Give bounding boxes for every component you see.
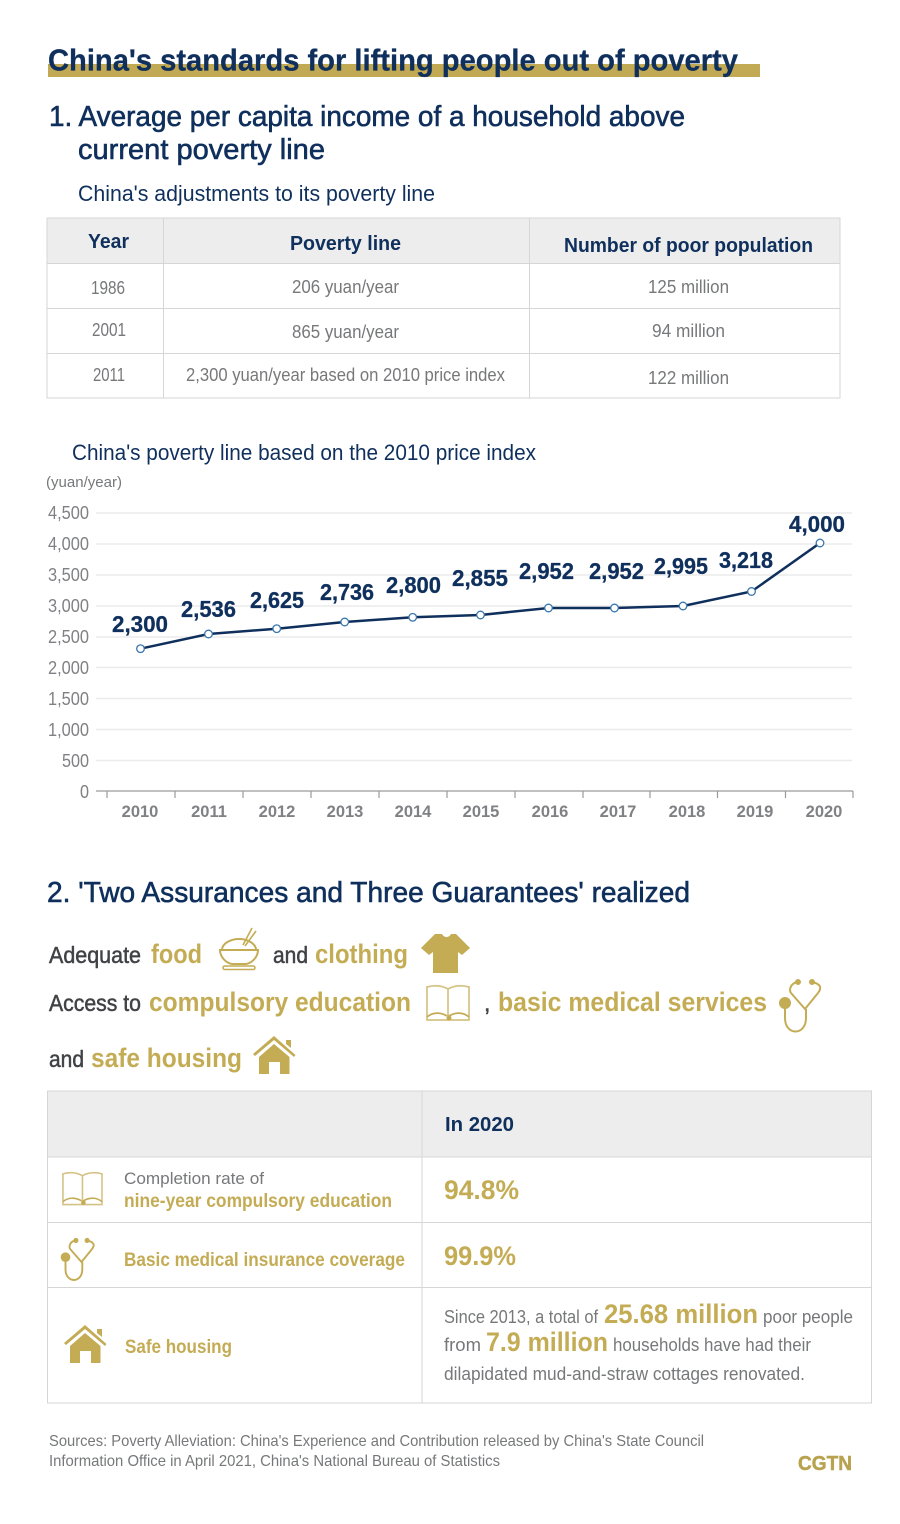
- table header row: Number of poor population: [564, 235, 813, 257]
- safe housing description: 25.68 million: [604, 1299, 758, 1329]
- icon: rice bowl: [220, 928, 258, 970]
- table row: 2001: 2001: [92, 320, 126, 340]
- safe housing description: [444, 1299, 853, 1384]
- safe housing description: 7.9 million: [486, 1327, 608, 1357]
- icon: stethoscope small: [61, 1239, 94, 1280]
- table row: 2011: 2011: [93, 365, 125, 385]
- x axis: [96, 791, 853, 798]
- x axis labels: 2013: [327, 803, 363, 821]
- row: safe housing: [64, 1299, 853, 1384]
- safe housing description: Since 2013, a total of: [444, 1307, 599, 1327]
- table header row: Year: [88, 231, 129, 253]
- line: food and clothing: [49, 928, 470, 973]
- heading: section 1: 1. Average per capita income of a household above: [49, 101, 685, 133]
- y axis labels: 500: [62, 751, 89, 771]
- table row: 2001: 865 yuan/year: [292, 322, 399, 342]
- y axis labels: 1,000: [48, 720, 89, 740]
- y axis labels: 3,500: [48, 565, 89, 585]
- line: food and clothing: clothing: [315, 939, 408, 969]
- y axis labels: [48, 503, 89, 802]
- x axis labels: 2011: [191, 803, 227, 821]
- data labels: 4,000: [789, 511, 845, 537]
- data labels: 3,218: [719, 547, 773, 573]
- line: education and medical services: Access to: [49, 990, 141, 1016]
- y axis unit: (yuan/year): [46, 474, 122, 491]
- x axis labels: 2018: [669, 803, 705, 821]
- table row: 1986: 206 yuan/year: [292, 277, 399, 297]
- table: 2020 results: [48, 1091, 872, 1403]
- table row: 1986: 125 million: [648, 277, 729, 297]
- x axis labels: 2019: [737, 803, 773, 821]
- data labels: 2,300: [112, 611, 168, 637]
- table row: 2011: 122 million: [648, 368, 729, 388]
- line: food and clothing: food: [151, 939, 202, 969]
- x axis labels: 2014: [395, 803, 432, 821]
- sources: Sources: Poverty Alleviation: China's Experience and Contribution released by China's State Council: [49, 1433, 704, 1450]
- line: safe housing: [49, 1036, 296, 1074]
- title: China's standards for lifting people out of poverty: [48, 42, 739, 78]
- table row: 1986: [91, 277, 729, 298]
- line: education and medical services: [49, 980, 820, 1032]
- icon: book small: [63, 1173, 102, 1205]
- y axis labels: 0: [80, 782, 89, 802]
- row: compulsory education: Completion rate of: [124, 1169, 264, 1188]
- line: food and clothing: and: [273, 942, 308, 968]
- data labels: [112, 511, 845, 637]
- line chart: poverty line 2010-2020: [46, 474, 853, 821]
- x axis labels: [122, 803, 842, 821]
- line: safe housing: and: [49, 1046, 84, 1072]
- row: safe housing: Safe housing: [125, 1337, 232, 1358]
- sources: Information Office in April 2021, China's National Bureau of Statistics: [49, 1453, 500, 1470]
- data labels: 2,952: [519, 558, 574, 584]
- sources: [49, 1433, 704, 1470]
- data labels: 2,536: [181, 596, 236, 622]
- icon: house: [253, 1036, 296, 1074]
- table row: 2011: [93, 365, 729, 388]
- assurances text block: [49, 928, 820, 1074]
- heading: section 1: current poverty line: [78, 134, 325, 166]
- table header row: [88, 231, 813, 257]
- logo: CGTN: CGTN: [798, 1453, 852, 1475]
- x axis labels: 2015: [463, 803, 499, 821]
- safe housing description: from: [444, 1335, 481, 1355]
- safe housing description: households have had their: [613, 1335, 811, 1355]
- y axis labels: 4,500: [48, 503, 89, 523]
- table row: 2001: [92, 320, 725, 342]
- row: medical insurance: 99.9%: [444, 1241, 516, 1271]
- row: medical insurance: [61, 1239, 516, 1280]
- heading: section 1: [49, 101, 685, 166]
- x axis labels: 2012: [259, 803, 295, 821]
- x axis labels: 2020: [806, 803, 842, 821]
- subheading: poverty line adjustments: China's adjustments to its poverty line: [78, 181, 435, 206]
- table header row: Poverty line: [290, 233, 401, 255]
- data labels: 2,855: [452, 565, 508, 591]
- table: poverty line adjustments: [47, 218, 840, 398]
- table row: 1986: 1986: [91, 278, 125, 298]
- y axis labels: 1,500: [48, 689, 89, 709]
- x axis labels: 2016: [532, 803, 568, 821]
- data points: [137, 539, 824, 652]
- y axis labels: 2,000: [48, 658, 89, 678]
- safe housing description: dilapidated mud-and-straw cottages renovated.: [444, 1364, 805, 1384]
- y axis labels: 4,000: [48, 534, 89, 554]
- line: education and medical services: basic medical services: [498, 987, 767, 1017]
- line: education and medical services: compulsory education: [149, 987, 411, 1017]
- table row: 2011: 2,300 yuan/year based on 2010 price index: [186, 365, 505, 385]
- heading: section 2: 2. 'Two Assurances and Three Guarantees' realized: [47, 877, 690, 909]
- data labels: 2,736: [320, 579, 374, 605]
- data labels: 2,995: [654, 553, 708, 579]
- line: education and medical services: ,: [484, 990, 490, 1016]
- data line: [140, 543, 820, 649]
- x axis labels: 2010: [122, 803, 158, 821]
- table row: 2001: 94 million: [652, 321, 725, 341]
- x axis labels: 2017: [600, 803, 636, 821]
- data labels: 2,952: [589, 558, 644, 584]
- row: medical insurance: Basic medical insurance coverage: [124, 1250, 405, 1271]
- table header: in 2020: In 2020: [445, 1114, 514, 1136]
- subheading: chart title: China's poverty line based on the 2010 price index: [72, 440, 536, 465]
- line: food and clothing: Adequate: [49, 942, 141, 968]
- row: compulsory education: 94.8%: [444, 1175, 519, 1205]
- icon: house small: [64, 1325, 106, 1363]
- data labels: 2,625: [250, 587, 304, 613]
- line: safe housing: safe housing: [91, 1043, 242, 1073]
- row: compulsory education: nine-year compulsory education: [124, 1191, 392, 1212]
- icon: t-shirt: [421, 934, 470, 973]
- icon: book: [427, 986, 469, 1020]
- row: compulsory education: [63, 1169, 519, 1212]
- y axis labels: 3,000: [48, 596, 89, 616]
- safe housing description: poor people: [763, 1307, 853, 1327]
- data labels: 2,800: [386, 572, 441, 598]
- y axis labels: 2,500: [48, 627, 89, 647]
- icon: stethoscope: [779, 980, 820, 1032]
